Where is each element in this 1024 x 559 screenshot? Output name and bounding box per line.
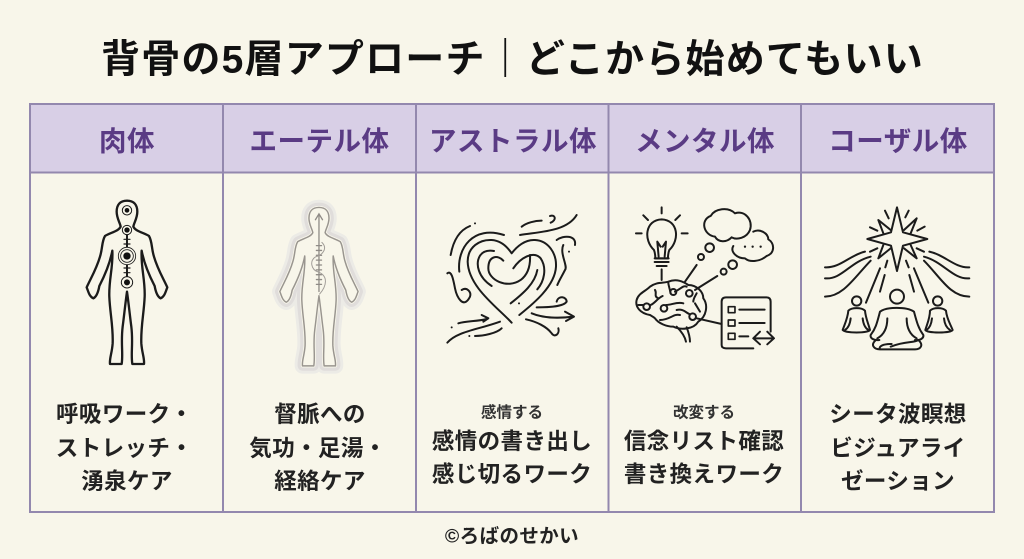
text: ストレッチ・ <box>56 436 193 461</box>
column heading: etheric body: エーテル体 <box>250 125 390 156</box>
column heading: mental body: メンタル体 <box>635 125 775 156</box>
text: etheric body practices: 督脈への <box>274 402 366 427</box>
text: ゼーション <box>841 469 955 494</box>
text: causal body practices: シータ波瞑想 <box>829 402 967 427</box>
text: 信念リスト確認 <box>624 429 784 454</box>
text: mental body practices: 改変する <box>673 404 735 421</box>
title: 背骨の5層アプローチ｜どこから始めてもいい <box>101 38 924 82</box>
text: 気功・足湯・ <box>249 436 387 461</box>
text: 湧泉ケア <box>81 469 173 494</box>
text: 書き換えワーク <box>624 462 784 487</box>
text: physical body practices: 呼吸ワーク・ <box>56 402 193 427</box>
column heading: astral body: アストラル体 <box>429 125 597 156</box>
credit: ©ろばのせかい <box>445 525 579 547</box>
text: astral body practices: 感情する <box>481 404 543 421</box>
column heading: causal body: コーザル体 <box>828 125 968 156</box>
text: 感情の書き出し <box>432 429 592 454</box>
text: 感じ切るワーク <box>432 462 592 487</box>
column heading: physical body: 肉体 <box>99 125 155 156</box>
text: 経絡ケア <box>274 469 366 494</box>
text: ビジュアライ <box>830 436 966 461</box>
